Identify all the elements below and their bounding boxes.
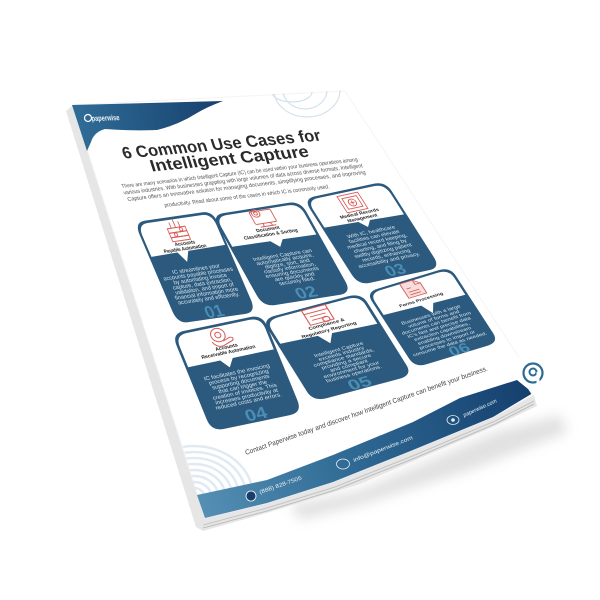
icon: compliance document bbox=[302, 305, 334, 326]
card text bbox=[160, 262, 245, 307]
header logo bbox=[84, 113, 121, 123]
card text: capture, data extraction, bbox=[172, 277, 234, 292]
card text bbox=[252, 248, 328, 289]
card text: charting, and filing by bbox=[352, 238, 409, 255]
brochure mockup bbox=[66, 90, 568, 531]
corner logo bbox=[510, 345, 560, 395]
page stack bbox=[66, 105, 537, 531]
card heading: Medical Records bbox=[339, 207, 381, 221]
card text: IC facilitates the invoicing bbox=[203, 363, 271, 382]
card text: digitize, sort, and bbox=[264, 258, 311, 270]
card text: are quickly and bbox=[274, 272, 316, 283]
card 5: compliance and regulatory reporting bbox=[262, 293, 414, 404]
contact: website bbox=[447, 398, 498, 424]
number: 06 bbox=[445, 340, 473, 359]
card text bbox=[203, 363, 283, 412]
card heading bbox=[339, 207, 384, 225]
card heading: Management bbox=[346, 213, 379, 224]
card text: accurately and efficiently. bbox=[177, 292, 241, 306]
contact: website: paperwise.com bbox=[463, 398, 498, 419]
card text: medical record keeping, bbox=[346, 233, 409, 251]
card text: providing a secure bbox=[321, 353, 373, 371]
icon: form document bbox=[400, 279, 427, 298]
card text bbox=[339, 223, 422, 270]
card text: IC streamlines your bbox=[171, 263, 221, 276]
number: 02 bbox=[291, 283, 321, 302]
card text: that can trigger the bbox=[218, 380, 268, 395]
card text: exceeds industry bbox=[318, 346, 366, 362]
card text: documents can benefit from bbox=[401, 311, 473, 336]
card heading bbox=[240, 223, 299, 242]
card text: accounts payable processes bbox=[163, 267, 234, 283]
number: 05 bbox=[344, 372, 375, 393]
number: 01 bbox=[201, 300, 228, 322]
icon: hand holding coin bbox=[207, 326, 235, 348]
card text: enabling downstream bbox=[417, 326, 473, 347]
card 2: document classification and sorting bbox=[212, 201, 352, 308]
card text: financial information more bbox=[174, 287, 239, 302]
card text: ensuring documents bbox=[265, 266, 320, 280]
decorative arcs top right bbox=[272, 90, 340, 118]
card 4: accounts receivable automation bbox=[172, 314, 303, 433]
fingerprint graphic bbox=[182, 444, 252, 494]
contact: email bbox=[336, 435, 414, 469]
card heading: Regulatory Reporting bbox=[301, 321, 358, 340]
card text: consume the data as needed. bbox=[412, 331, 488, 358]
card 3: medical records management bbox=[303, 181, 441, 287]
contact: email: info@paperwise.com bbox=[353, 435, 414, 464]
card text: increases productivity at bbox=[215, 388, 279, 406]
card heading bbox=[161, 238, 208, 255]
card text: accessibility and privacy. bbox=[357, 252, 422, 270]
card text: With IC, healthcare bbox=[346, 225, 397, 240]
card heading: Payable Automation bbox=[163, 243, 208, 255]
icon: monitor with gear bbox=[248, 208, 278, 228]
card text bbox=[308, 340, 386, 385]
card text: volume of forms and bbox=[407, 310, 461, 329]
icon: medical record bbox=[337, 192, 368, 213]
intro paragraph: There are many scenarios in which Intelligent Capture (IC) can be used within your business operations among bbox=[121, 157, 359, 190]
card text: records, enhancing bbox=[361, 248, 412, 264]
card text: business operations. bbox=[325, 365, 384, 384]
card text: Businesses with a large bbox=[400, 304, 462, 326]
contact: phone: (888) 828-7505 bbox=[259, 476, 303, 496]
icon: money stack bbox=[164, 218, 191, 242]
card heading: Document bbox=[255, 225, 282, 234]
footer band bbox=[197, 380, 533, 518]
card heading: Classification & Sorting bbox=[243, 228, 299, 242]
card 6: forms processing bbox=[366, 267, 501, 371]
card text: creation of invoices. This bbox=[212, 383, 278, 402]
card text: compliance standards, bbox=[313, 348, 376, 369]
call to action: Contact Paperwise today and discover how Intelligent Capture can benefit your business. bbox=[244, 364, 489, 457]
title: 6 Common Use Cases for bbox=[120, 126, 324, 162]
drop shadow bbox=[290, 415, 568, 520]
card text: classify information, bbox=[263, 262, 318, 275]
header logo: paperwise bbox=[91, 113, 121, 123]
intro paragraph bbox=[121, 157, 367, 209]
card text: environment for your bbox=[323, 361, 381, 380]
card text: IC's fast and precise data bbox=[407, 316, 472, 340]
card text: processes to import or bbox=[418, 330, 477, 351]
intro paragraph: Capture offers an innovative solution for managing documents, simplifying processes, and improving bbox=[127, 170, 367, 203]
card text: reduced costs and errors. bbox=[215, 392, 283, 412]
intro paragraph: various industries. With businesses grappling with large volumes of data across diverse formats, Intelligent bbox=[123, 163, 364, 196]
card text: securely filed. bbox=[278, 276, 317, 287]
card heading: Receivable Automation bbox=[201, 344, 257, 361]
card 1: accounts payable automation bbox=[134, 211, 257, 326]
card text: extraction capabilities, bbox=[413, 321, 471, 343]
card heading: Forms Processing bbox=[398, 291, 445, 309]
number: 03 bbox=[381, 260, 410, 280]
title: Intelligent Capture bbox=[148, 142, 311, 175]
card text bbox=[393, 302, 488, 358]
card heading: Accounts bbox=[214, 342, 239, 353]
page sheet bbox=[73, 91, 537, 518]
card text: swiftly digitizing patient bbox=[353, 243, 414, 260]
card text: validation, and import of bbox=[174, 282, 235, 296]
card text: facilities can elevate bbox=[348, 229, 401, 245]
contact: phone bbox=[246, 476, 303, 501]
card text: Intelligent Capture bbox=[313, 341, 365, 359]
intro paragraph: productivity. Read about some of the cases in which IC is commonly used. bbox=[164, 184, 331, 209]
header wave bbox=[72, 101, 223, 151]
number: 04 bbox=[242, 403, 271, 425]
card text: Intelligent Capture can bbox=[252, 248, 313, 263]
card text: process by recognizing bbox=[208, 369, 270, 387]
card text: supporting documents bbox=[211, 374, 271, 391]
card text: automatically acquire, bbox=[255, 253, 315, 267]
card heading: Compliance & bbox=[307, 317, 346, 332]
card text: by automating invoice bbox=[173, 273, 228, 286]
card text: and compliant bbox=[329, 359, 370, 374]
card heading: Accounts bbox=[174, 239, 197, 248]
